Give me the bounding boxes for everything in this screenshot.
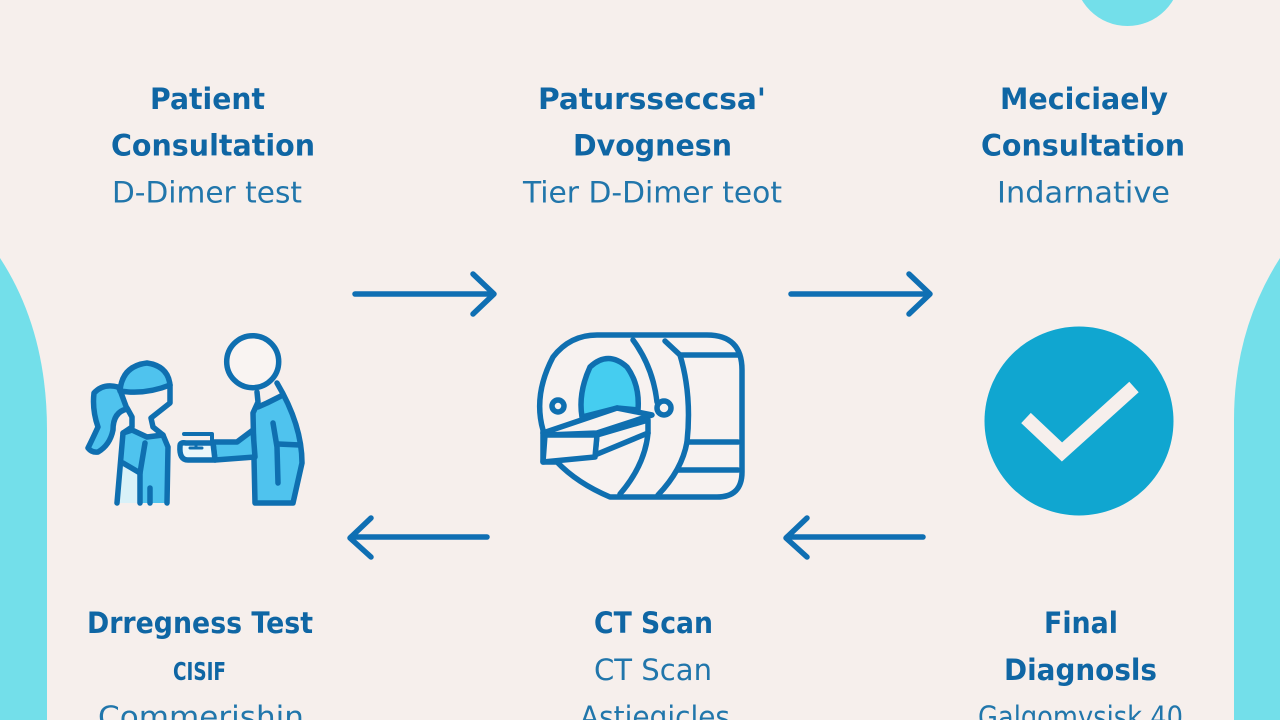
- badge circle: [984, 326, 1174, 516]
- small label: CISIF: [173, 657, 226, 686]
- table top: [543, 408, 652, 435]
- heading line: Meciciaely: [1000, 82, 1168, 116]
- text block: lower middle: [580, 606, 730, 720]
- scanner bore: [581, 358, 638, 417]
- table front: [543, 435, 597, 462]
- check mark: [1026, 387, 1134, 452]
- patient figure: [88, 363, 170, 503]
- arrow: top middle to right: [791, 274, 930, 314]
- side panels: [680, 352, 738, 358]
- doctor figure: [180, 336, 302, 503]
- left cyan side shape: [0, 258, 47, 720]
- arrow: bottom middle to left: [350, 518, 487, 557]
- text block: right top: [981, 82, 1185, 210]
- heading line: Patursseccsa': [538, 82, 766, 116]
- arrow: bottom right to left: [786, 518, 923, 557]
- text block: middle top: [522, 82, 782, 210]
- arrow: top left to right: [355, 274, 494, 314]
- subtext: CT Scan: [594, 653, 712, 687]
- text block: lower right: [978, 606, 1183, 720]
- subtext: Tier D-Dimer teot: [522, 176, 782, 210]
- icon: CT scanner: [540, 335, 742, 497]
- table side: [595, 420, 648, 455]
- heading line: Dvognesn: [573, 128, 732, 162]
- top cyan circle: [1074, 0, 1180, 26]
- heading line: Drregness Test: [87, 606, 313, 640]
- knobs: [552, 400, 564, 412]
- scanner body: [540, 335, 742, 497]
- icon: check mark badge: [984, 326, 1174, 516]
- heading line: Final: [1044, 606, 1118, 640]
- heading line: Consultation: [111, 128, 315, 162]
- subtext: Indarnative: [997, 176, 1170, 210]
- heading line: Diagnosls: [1004, 653, 1157, 687]
- right cyan side shape: [1234, 258, 1280, 720]
- icon: patient and doctor: [88, 336, 302, 503]
- heading line: CT Scan: [594, 606, 713, 640]
- heading line: Patient: [150, 82, 265, 116]
- text block: lower left: [87, 606, 313, 720]
- text block: patient consultation: [111, 82, 315, 210]
- subtext: D-Dimer test: [112, 176, 302, 210]
- ring arcs: [633, 340, 657, 402]
- heading line: Consultation: [981, 128, 1185, 162]
